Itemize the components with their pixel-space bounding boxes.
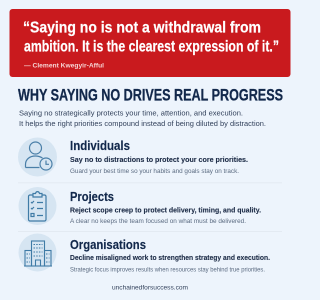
panel: projects (18, 187, 261, 225)
panel: organisations: Decline misaligned work to strengthen strategy and execution. (70, 253, 270, 262)
panel: quote banner (10, 9, 290, 77)
panel: projects: A clear no keeps the team focused on what must be delivered. (70, 218, 246, 225)
panel: individuals (18, 138, 248, 176)
label: individuals: Individuals (70, 139, 130, 153)
panel: organisations: Strategic focus improves results when resources stay behind true priorities. (70, 266, 265, 274)
quote attribution: — Clement Kwegyir-Afful (24, 62, 104, 70)
footer url: unchainedforsuccess.com (112, 284, 188, 292)
intro text (19, 110, 266, 128)
panel: individuals: Guard your best time so your habits and goals stay on track. (70, 168, 239, 175)
intro text: Saying no strategically protects your time, attention, and execution. (19, 110, 243, 118)
label: organisations: Organisations (70, 238, 146, 252)
intro text: It helps the right priorities compound instead of being diluted by distraction. (19, 121, 266, 128)
quote text (23, 20, 279, 56)
icon: clipboard checklist (18, 187, 56, 225)
panel: projects: Reject scope creep to protect delivery, timing, and quality. (70, 206, 261, 214)
icon: office building (18, 234, 56, 272)
label: projects: Projects (70, 190, 114, 204)
panel: organisations (18, 234, 270, 274)
icon: person with clock (18, 138, 57, 176)
quote text: “Saying no is not a withdrawal from (23, 20, 261, 36)
panel: individuals: Say no to distractions to protect your core priorities. (70, 155, 248, 164)
